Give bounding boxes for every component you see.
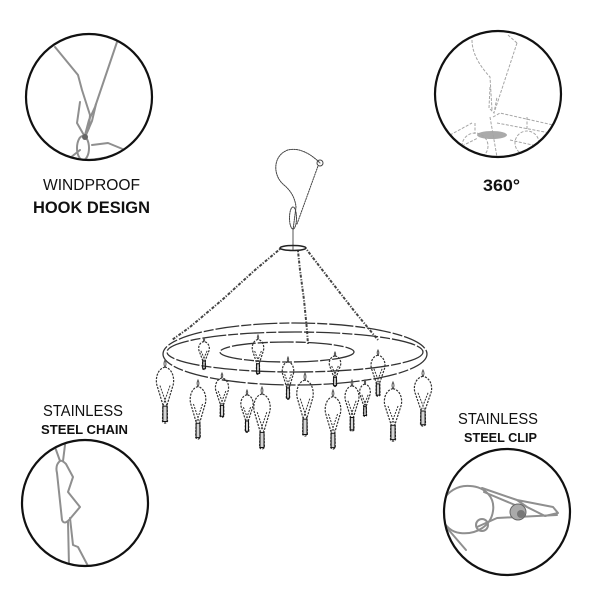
label: hook design: HOOK DESIGN <box>33 199 150 217</box>
panel: stainless steel clip <box>440 411 570 575</box>
label: stainless: STAINLESS <box>458 411 538 428</box>
main product: clip hanger <box>156 149 432 449</box>
circle outline <box>444 449 570 575</box>
inset: hook close-up <box>55 42 125 160</box>
inset: chain close-up <box>55 445 88 566</box>
label: steel chain: STEEL CHAIN <box>41 423 128 437</box>
panel: 360 degree rotation <box>435 31 561 195</box>
panel: stainless steel chain <box>22 403 148 566</box>
label: steel clip: STEEL CLIP <box>464 431 537 445</box>
panel: windproof hook design <box>26 34 152 217</box>
circle outline <box>22 440 148 566</box>
support chains <box>172 249 378 345</box>
label: windproof: WINDPROOF <box>43 177 140 194</box>
hanger hook <box>276 149 323 251</box>
label: 360 degrees: 360° <box>483 177 520 195</box>
inset: swivel close-up <box>450 35 555 159</box>
inset: clip close-up <box>440 486 558 550</box>
hanger rings <box>163 323 427 385</box>
circle outline <box>435 31 561 157</box>
label: stainless: STAINLESS <box>43 403 123 420</box>
clothes clips <box>156 335 432 449</box>
circle outline <box>26 34 152 160</box>
